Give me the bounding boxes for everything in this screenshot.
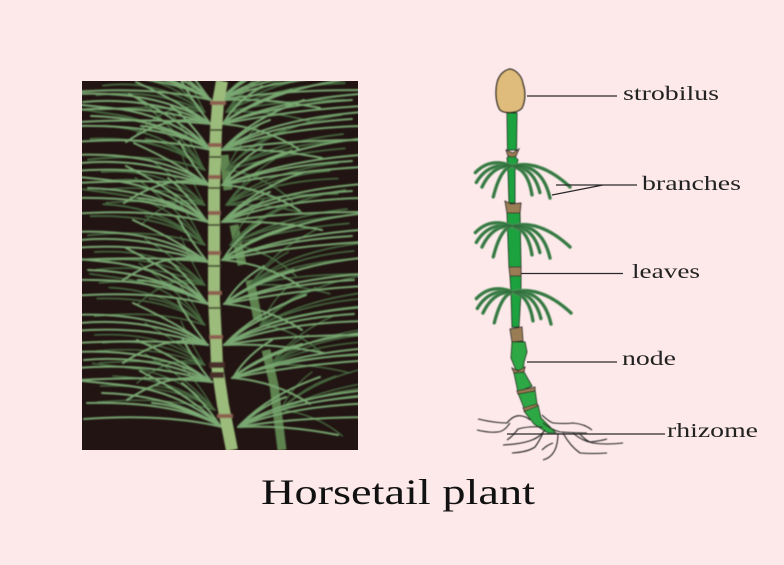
strobilus cone: [496, 69, 525, 112]
branch whorls: [475, 163, 570, 198]
title: Horsetail plant: [261, 472, 535, 512]
stem nodes: [208, 103, 233, 416]
photo: horsetail plant: [82, 81, 358, 450]
label: branches: branches: [642, 173, 741, 195]
label: strobilus: strobilus: [623, 83, 719, 105]
rhizome roots: [477, 415, 623, 460]
label: branches: [552, 173, 741, 195]
main stem: [214, 81, 232, 450]
infographic: horsetail plant: [82, 68, 757, 512]
background stem: [224, 155, 282, 450]
label: leaves: leaves: [632, 261, 700, 283]
stem: [507, 113, 556, 433]
right sprays: [220, 81, 358, 437]
label: node: node: [622, 348, 676, 370]
dim branch layer: [82, 81, 358, 438]
label: rhizome: rhizome: [667, 420, 758, 442]
diagram: horsetail anatomy: [475, 69, 623, 460]
left sprays: [82, 81, 222, 429]
brown nodes: [505, 149, 538, 411]
